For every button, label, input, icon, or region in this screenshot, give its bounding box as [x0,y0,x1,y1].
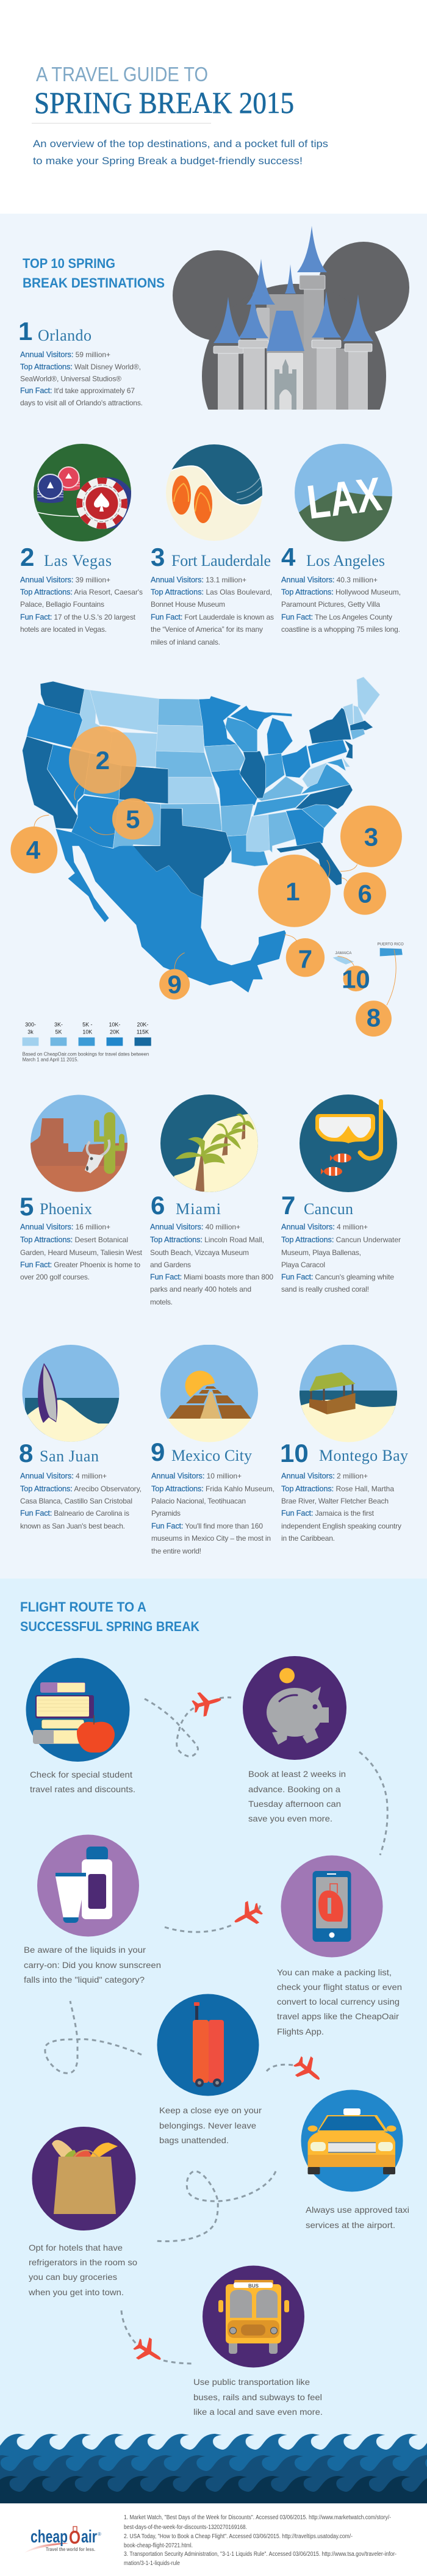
legend: 10K- [109,1022,120,1028]
destination 8: san juan [18,1345,142,1530]
legend: 20K [110,1029,120,1035]
illustration: lax sign [295,444,393,543]
details: los angeles: Paramount Pictures, Getty Villa [281,600,380,609]
icon: plane 1 [190,1687,224,1718]
details: orlando: Fun Fact: It'd take approximately 67 [20,386,135,395]
icon: phone with luggage [281,1856,383,1957]
name: miami: Miami [176,1200,221,1218]
details: orlando: Annual Visitors: 59 million+ [20,350,110,359]
references [124,2514,396,2567]
number 4: 4 [281,543,296,571]
text: belongings: belongings. Never leave [159,2121,256,2130]
text: groceries: refrigerators in the room so [29,2257,137,2267]
illustration: pyramid and sun [160,1345,258,1443]
details: los angeles: Annual Visitors: 40.3 million+ [281,576,378,584]
illustration: desert [30,1094,128,1196]
details: phoenix: Fun Fact: Greater Phoenix is home to [20,1261,140,1269]
details: montego bay: Top Attractions: Rose Hall, Martha [281,1485,394,1493]
legend: 3K- [54,1022,63,1028]
legend [23,1022,151,1046]
icon: plane 2 [229,1898,266,1933]
details: fort lauderdale: Bonnet House Museum [151,600,225,609]
name: cancun: Cancun [304,1200,353,1218]
details: cancun: sand is really crushed coral! [281,1285,369,1293]
details: cancun: Museum, Playa Ballenas, [281,1248,361,1257]
legend: 20K- [137,1022,148,1028]
number 6: 6 [151,1191,165,1220]
details: san juan: Fun Fact: Balneario de Carolina is [20,1509,129,1518]
legend: 10K [82,1029,92,1035]
number 10: 10 [280,1439,309,1467]
references: best-days-of-the-week-for-discounts-1320270169168. [124,2524,247,2531]
details: miami: and Gardens [150,1261,191,1269]
references: book-cheap-flight-20721.html. [124,2542,193,2549]
details: los angeles: Fun Fact: The Los Angeles County [281,613,392,621]
text: book in advance: Book at least 2 weeks in [248,1769,346,1779]
details: cancun: Fun Fact: Cancun's gleaming white [281,1273,394,1281]
tip 5: belongings [157,1994,262,2145]
icon: plane 4 [130,2334,167,2370]
details: miami: parks and nearly 400 hotels and [150,1285,251,1293]
text: taxi [306,2205,409,2230]
icon: taxi [301,2090,403,2191]
text: public transportation: Use public transportation like [193,2377,310,2387]
details: mexico city: museums in Mexico City – the most in [151,1534,271,1543]
number 5: 5 [20,1192,34,1221]
details: mexico city: Annual Visitors: 10 million+ [151,1472,242,1480]
illustration: beach and flip flops [166,440,264,541]
text: public transportation: buses, rails and subways to feel [193,2392,322,2402]
text: travel apps: convert to local currency using [277,1997,400,2006]
header [32,63,328,167]
details: fort lauderdale: Annual Visitors: 13.1 million+ [151,576,246,584]
name: orlando: Orlando [38,327,92,344]
subtitle: to make your Spring Break a budget-friendly success! [33,156,303,167]
number 2: 2 [20,543,34,571]
heading: flight route: SUCCESSFUL SPRING BREAK [20,1619,199,1634]
number 7: 7 [281,1191,295,1220]
details: mexico city: Palacio Nacional, Teotihuacan [151,1497,246,1505]
details: cancun: Playa Caracol [281,1261,325,1269]
map markers: 7 [298,945,312,974]
tip 3: liquids [24,1835,161,1984]
details: fort lauderdale: Fun Fact: Fort Lauderdale is known as [151,613,274,621]
map markers: 1 [285,877,300,906]
text: liquids: falls into the "liquid" category? [24,1975,145,1984]
destination 7: cancun [281,1094,401,1293]
logo: cheapoair: cheap [30,2527,68,2547]
destination 6: miami [150,1094,273,1306]
puerto rico [380,948,403,956]
icon: grocery bag [32,2127,135,2230]
details: san juan: Casa Blanca, Castillo San Cristobal [20,1497,132,1505]
details: los angeles [281,576,401,634]
details: los angeles: coastline is a whopping 75 miles long. [281,625,400,634]
details: montego bay: in the Caribbean. [281,1534,335,1543]
icon: books and apple [26,1658,129,1762]
illustration: lax sign: LAX [304,467,384,529]
details: san juan: known as San Juan's best beach. [20,1522,125,1530]
logo: cheapoair [24,2527,101,2553]
details: montego bay: independent English speaking country [281,1522,401,1530]
details: las vegas: Annual Visitors: 39 million+ [20,576,110,584]
details: phoenix: Annual Visitors: 16 million+ [20,1223,110,1231]
text: book in advance: advance. Booking on a [248,1784,340,1794]
subtitle: An overview of the top destinations, and a pocket full of tips [33,139,328,150]
map states [23,677,380,898]
name: phoenix: Phoenix [40,1200,92,1218]
label puerto rico: PUERTO RICO [378,942,404,947]
text: belongings: bags unattended. [159,2135,229,2145]
details: san juan: Annual Visitors: 4 million+ [20,1472,107,1480]
number 1: 1 [18,317,32,346]
details: mexico city: Top Attractions: Frida Kahlo Museum, [151,1485,274,1493]
details: miami: Annual Visitors: 40 million+ [150,1223,240,1231]
details: miami: Fun Fact: Miami boasts more than 800 [150,1273,273,1281]
text: belongings [159,2105,262,2145]
logo: cheapoair: ® [98,2531,101,2537]
details: las vegas: Palace, Bellagio Fountains [20,600,104,609]
tip 4: travel apps [277,1856,402,2036]
map markers: 3 [364,823,378,852]
details: mexico city: Fun Fact: You'll find more than 160 [151,1522,263,1530]
references: mation/3-1-1-liquids-rule [124,2560,180,2567]
details: miami: motels. [150,1298,173,1306]
logo: cheapoair: air [81,2527,97,2547]
details: phoenix [20,1223,143,1281]
details: montego bay: Brae River, Walter Fletcher Beach [281,1497,389,1505]
details: fort lauderdale: the “Venice of America” for its many [151,625,263,634]
details: phoenix: over 200 golf courses. [20,1273,90,1281]
heading: top 10 spring break destinations: BREAK DESTINATIONS [23,275,165,291]
jamaica [333,956,354,964]
text: groceries [28,2243,137,2297]
details: orlando: Top Attractions: Walt Disney World®, [20,363,141,371]
destination 4: los angeles [281,444,401,634]
mexico [56,829,286,993]
legend: 115K [137,1029,149,1035]
title line: spring break 2015: SPRING BREAK 2015 [34,85,294,120]
details: san juan [20,1472,142,1530]
number 3: 3 [151,543,165,571]
illustration: poker chips [34,444,134,541]
illustration: surfboard on beach [22,1345,120,1442]
text: student rates: travel rates and discounts. [30,1784,135,1794]
details: mexico city [151,1472,274,1555]
details: montego bay: Fun Fact: Jamaica is the first [281,1509,375,1518]
destination 2: las vegas [20,444,143,634]
illustration: snorkel mask and clownfish [300,1094,397,1192]
panel: flight route background [0,1579,427,2503]
text: taxi: services at the airport. [306,2220,395,2230]
references: 2. USA Today, "How to Book a Cheap Flight". Accessed 03/06/2015. http://traveltips.usatoday.com/- [124,2533,353,2540]
name: las vegas: Las Vegas [44,552,112,570]
details: miami [150,1223,273,1306]
icon: plane 3 [290,2052,327,2089]
panel: top 10 destinations background [0,214,427,1579]
heading: flight route [20,1599,199,1634]
tip 2: book in advance [243,1656,346,1823]
logo: cheapoair: Travel the world for less. [46,2547,95,2552]
text: liquids [24,1945,161,1984]
title line: a travel guide to: A TRAVEL GUIDE TO [36,63,208,85]
name: montego bay: Montego Bay [319,1447,408,1464]
route dashes [45,1698,387,2364]
legend: 5K - [82,1022,92,1028]
text: groceries: when you get into town. [28,2287,124,2297]
map markers: 10 [342,965,370,994]
heading: top 10 spring break destinations [23,256,165,291]
destination 10: montego bay [280,1345,408,1543]
subtitle [33,139,328,167]
text: travel apps: You can make a packing list, [277,1967,392,1977]
heading: flight route: FLIGHT ROUTE TO A [20,1599,146,1615]
details: fort lauderdale: Top Attractions: Las Olas Boulevard, [151,588,272,596]
map markers: 2 [96,746,110,775]
map markers: 6 [358,880,372,908]
details: orlando [20,350,143,407]
details: montego bay [281,1472,401,1543]
references: 1. Market Watch, "Best Days of the Week for Discounts". Accessed 03/06/2015. http://www.marketwatch.com/story/- [124,2514,391,2521]
details: las vegas: Fun Fact: 17 of the U.S.'s 20 largest [20,613,136,621]
tip 1: student rates [26,1658,135,1794]
details: phoenix: Garden, Heard Museum, Taliesin West [20,1248,143,1257]
text: book in advance [248,1769,346,1823]
details: montego bay: Annual Visitors: 2 million+ [281,1472,368,1480]
details: cancun: Top Attractions: Cancun Underwater [281,1236,401,1244]
name: fort lauderdale: Fort Lauderdale [171,552,271,570]
icon: suitcase [157,1994,259,2096]
details: las vegas [20,576,143,634]
details: orlando: days to visit all of Orlando's attractions. [20,399,143,407]
icon: bus [203,2266,304,2367]
map markers: 8 [367,1004,381,1032]
text: student rates [30,1770,135,1794]
details: miami: Top Attractions: Lincoln Road Mall, [150,1236,264,1244]
text: book in advance: Tuesday afternoon can [248,1799,341,1809]
text: belongings: Keep a close eye on your [159,2105,262,2115]
text: student rates: Check for special student [30,1770,132,1779]
map markers [10,726,402,1037]
details: mexico city: the entire world! [151,1547,201,1555]
legend: 3k [27,1029,34,1035]
details: fort lauderdale [151,576,274,646]
text: liquids: Be aware of the liquids in your [24,1945,146,1955]
destination 3: fort lauderdale [151,440,274,646]
destination 1: orlando [18,317,143,407]
tip 8: public transportation [193,2266,323,2417]
details: miami: South Beach, Vizcaya Museum [150,1248,249,1257]
illustration: palm trees [160,1094,262,1196]
number 8: 8 [19,1439,33,1467]
details: mexico city: Pyramids [151,1509,181,1518]
details: cancun [281,1223,401,1293]
icon: piggy bank [243,1656,346,1760]
text: travel apps: check your flight status or even [277,1982,402,1992]
map markers: 4 [26,836,41,864]
illustration: orlando castle with mouse ears [173,226,409,410]
illustration: beach hut [300,1345,397,1442]
details: las vegas: Top Attractions: Aria Resort, Caesar's [20,588,143,596]
number 9: 9 [151,1438,165,1466]
map: us and mexico bookings choropleth [10,677,404,1062]
text: travel apps [277,1967,402,2036]
text: taxi: Always use approved taxi [306,2205,409,2215]
map source note: Based on CheapOair.com bookings for travel dates between [23,1051,149,1057]
map markers: 5 [126,805,140,834]
destination 5: phoenix [20,1094,143,1281]
icon: sunscreen bottles [37,1835,139,1936]
map source note: March 1 and April 11 2015. [23,1057,79,1062]
heading: top 10 spring break destinations: TOP 10 SPRING [23,256,115,271]
legend: 300- [25,1022,36,1028]
details: los angeles: Top Attractions: Hollywood Museum, [281,588,401,596]
map source note [23,1051,149,1062]
name: mexico city: Mexico City [171,1447,252,1464]
details: fort lauderdale: miles of inland canals. [151,638,220,646]
text: liquids: carry-on: Did you know sunscreen [24,1960,161,1970]
label jamaica: JAMAICA [335,951,352,955]
tip 6: taxi [301,2090,409,2230]
waves [0,2434,427,2503]
tip 7: groceries [28,2127,137,2297]
text: public transportation: like a local and save even more. [193,2407,323,2417]
text: travel apps: Flights App. [277,2027,324,2036]
destination 9: mexico city [151,1345,274,1555]
text: groceries: you can buy groceries [29,2272,117,2282]
details: cancun: Annual Visitors: 4 million+ [281,1223,368,1231]
legend: 5K [56,1029,62,1035]
name: san juan: San Juan [40,1447,99,1465]
details: las vegas: hotels are located in Vegas. [20,625,107,634]
text: travel apps: travel apps like the CheapOair [277,2011,399,2021]
details: phoenix: Top Attractions: Desert Botanical [20,1236,128,1244]
map markers: 9 [167,970,182,999]
logo: cheapoair: O [69,2527,81,2548]
details: orlando: SeaWorld®, Universal Studios® [20,375,121,383]
text: public transportation [193,2377,323,2417]
text: book in advance: save you even more. [248,1814,332,1823]
name: los angeles: Los Angeles [306,552,385,570]
icon: bus: BUS [248,2283,259,2289]
text: groceries: Opt for hotels that have [29,2243,123,2252]
details: san juan: Top Attractions: Arecibo Observatory, [20,1485,142,1493]
